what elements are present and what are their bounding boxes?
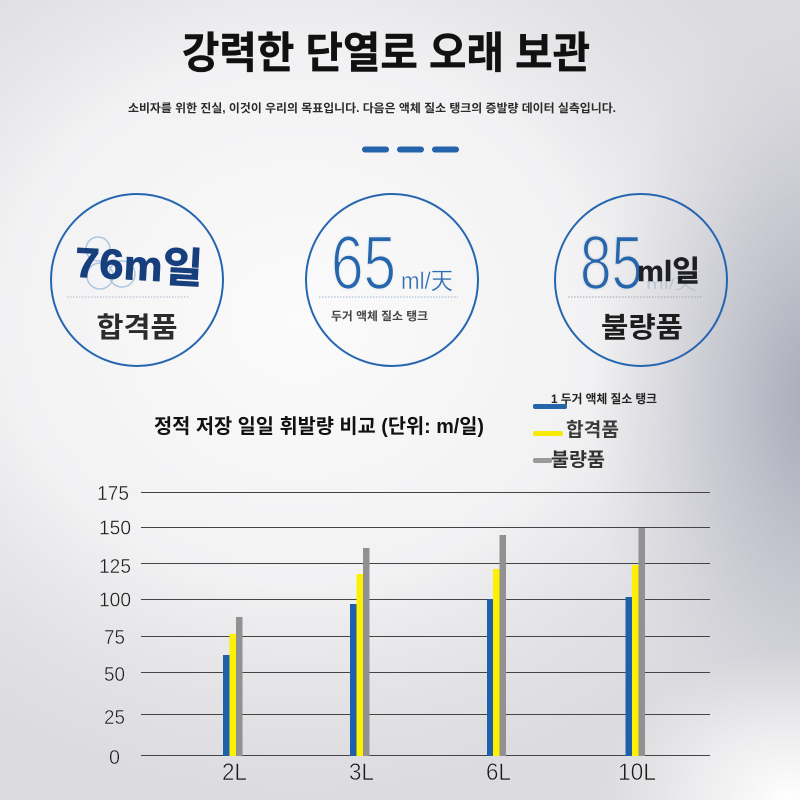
bars: 10L	[626, 528, 645, 756]
x axis labels: 10L	[618, 759, 656, 786]
y axis labels: 0	[109, 747, 120, 769]
y axis labels: 75	[104, 627, 125, 649]
legend: 불량품	[551, 449, 605, 471]
y axis labels: 25	[104, 707, 125, 729]
y axis labels: 100	[99, 590, 131, 612]
legend: 1 두거 액체 질소 탱크	[551, 391, 657, 406]
y axis labels	[97, 483, 131, 769]
bar chart	[97, 483, 710, 786]
y axis labels: 175	[97, 483, 129, 505]
ghost remnant of the old unit: ml/天	[646, 276, 696, 293]
unit: ml: ml일	[637, 255, 700, 288]
x axis labels: 3L	[349, 759, 374, 786]
bars: 3L	[350, 548, 370, 756]
value: 85: 85	[580, 221, 643, 306]
y axis labels: 125	[99, 556, 131, 578]
x axis labels: 6L	[486, 759, 511, 786]
ghost remnants of the old number	[86, 237, 135, 289]
chart title: 정적 저장 일일 휘발량 비교 (단위: m/일)	[154, 415, 484, 438]
panel: qualified product circle	[51, 194, 223, 366]
unit: ml/天	[401, 268, 453, 295]
label: defective: 불량품	[601, 312, 683, 343]
value: 65: 65	[331, 221, 396, 306]
legend: 합격품	[566, 419, 619, 441]
y axis labels: 150	[99, 518, 131, 540]
panel: thick tank circle	[306, 194, 478, 366]
value: 76ml: 76m일	[74, 239, 204, 292]
y axis labels: 50	[104, 664, 125, 686]
panel: defective product circle	[555, 194, 727, 366]
title: 강력한 단열로 오래 보관	[182, 30, 590, 78]
label: thick tank: 두거 액체 질소 탱크	[331, 309, 428, 323]
x axis labels: 2L	[222, 759, 247, 786]
three-dash divider	[362, 146, 459, 152]
subtitle: 소비자를 위한 진실, 이것이 우리의 목표입니다. 다음은 액체 질소 탱크의 증발량 데이터 실측입니다.	[128, 101, 616, 115]
legend	[533, 391, 657, 471]
label: qualified: 합격품	[96, 312, 178, 343]
bars: 2L	[223, 617, 242, 756]
x axis labels	[222, 759, 656, 786]
bars: 6L	[487, 535, 506, 756]
